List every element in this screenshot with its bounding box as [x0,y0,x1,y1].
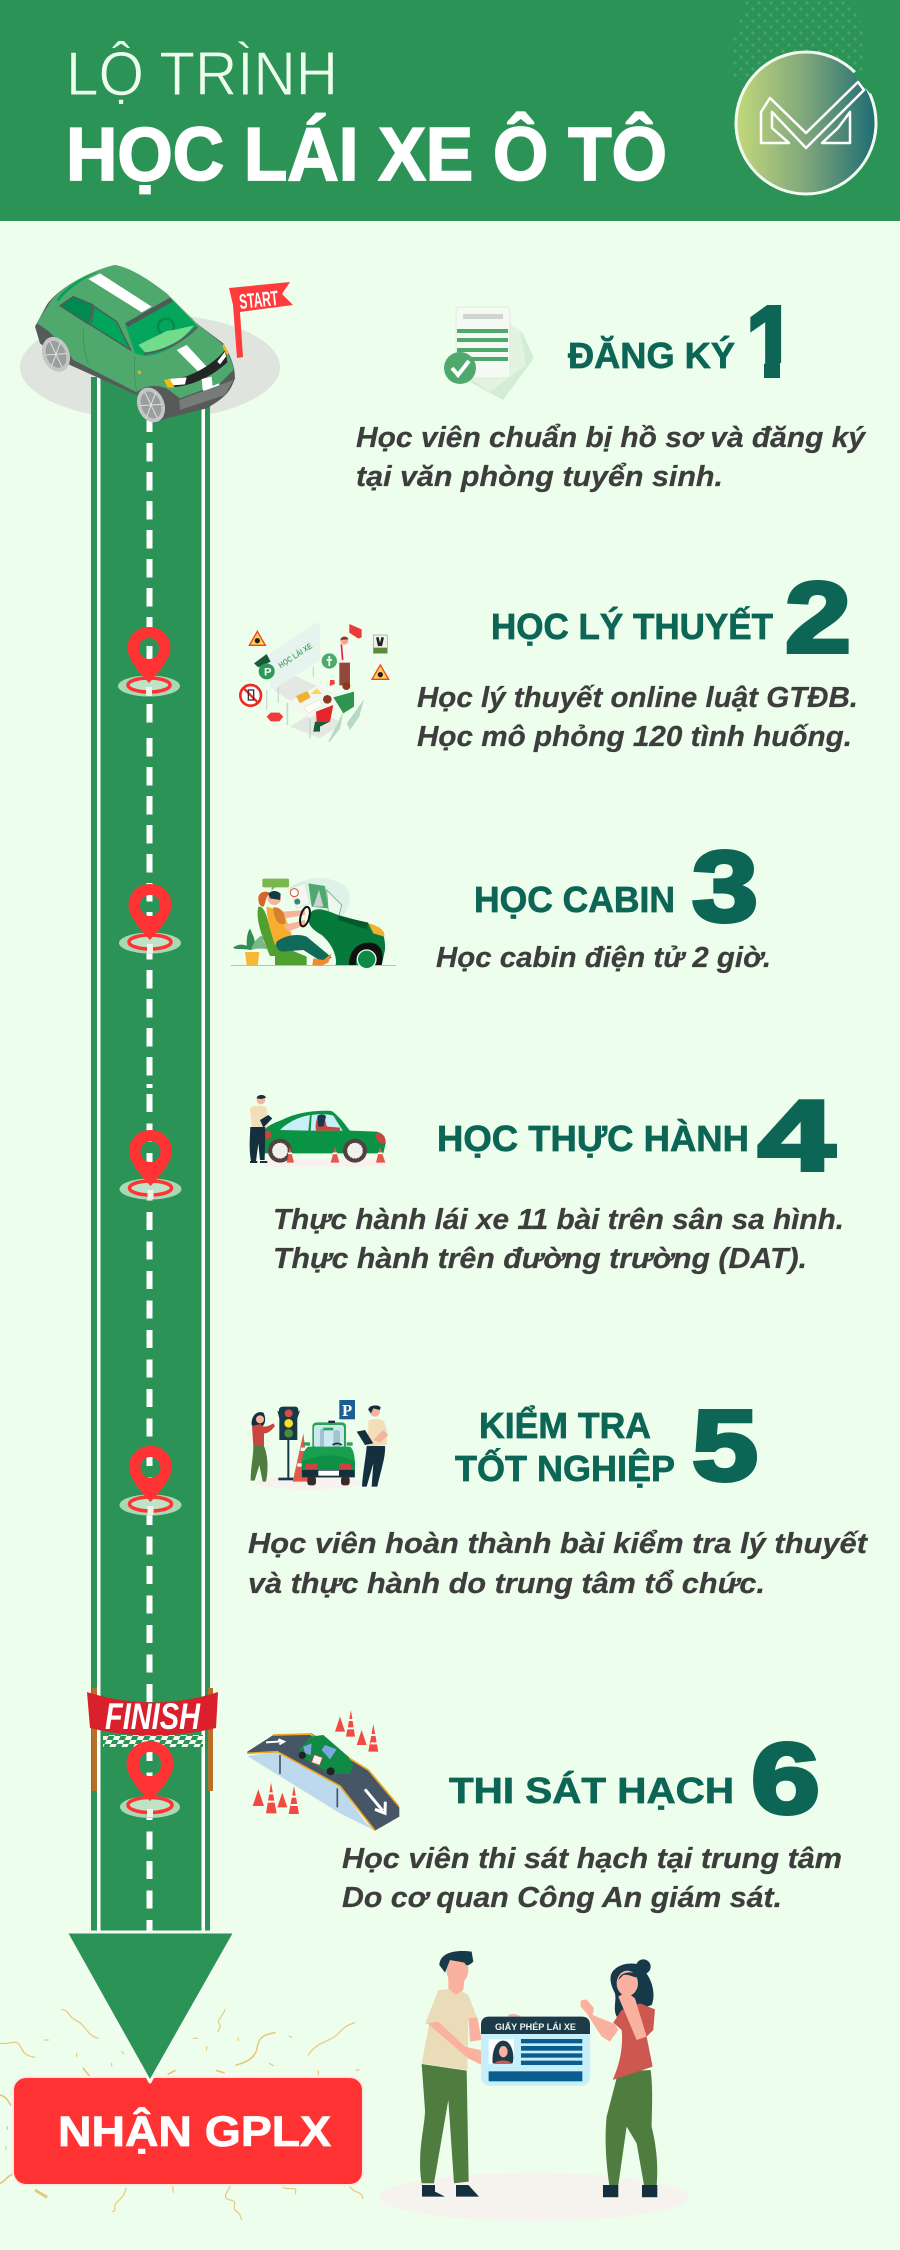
step 5 description [248,1528,868,1600]
start flag [229,282,293,358]
step 1 icon: documents [444,307,534,400]
step 6 description: Học viên thi sát hạch tại trung tâm [342,1843,842,1875]
pin 3 [120,1130,182,1200]
step 4 description [273,1204,844,1275]
step 2 icon: theory class: HỌC LÁI XE [277,641,314,670]
step 4 description: Thực hành lái xe 11 bài trên sân sa hình. [273,1204,844,1236]
confetti [0,2009,363,2220]
step 5 icon: checkpoint: P [342,1401,352,1420]
icon: car at start [35,265,235,427]
logo [736,52,876,194]
step 4 heading: HỌC THỰC HÀNH [437,1118,749,1159]
step 3 heading: HỌC CABIN [474,879,675,920]
step 5 icon: checkpoint [251,1400,388,1489]
licence card [481,2017,590,2086]
step 5 heading: TỐT NGHIỆP [455,1447,675,1489]
step 5 heading [455,1404,675,1489]
start flag: START [238,287,279,314]
header banner [0,0,900,221]
step 2 number: 2 [785,562,851,674]
step 5 description: và thực hành do trung tâm tổ chức. [248,1568,765,1600]
step 1 description: Học viên chuẩn bị hồ sơ và đăng ký [356,422,867,454]
pin 2 [119,884,181,954]
road [91,377,210,1933]
man [420,1951,523,2197]
step 4 icon: practice car [250,1095,387,1167]
step 1 description [356,422,867,493]
step 2 description: Học mô phỏng 120 tình huống. [417,721,852,753]
people holding licence [379,1951,689,2221]
step 4 description: Thực hành trên đường trường (DAT). [273,1243,807,1275]
step 1 description: tại văn phòng tuyển sinh. [356,461,723,493]
button: nhận GPLX [13,2077,363,2185]
step 2 description: Học lý thuyết online luật GTĐB. [417,682,858,714]
pin 5 [120,1741,180,1818]
step 3 number: 3 [692,831,758,943]
step 6 number: 6 [751,1723,820,1835]
title line 2: HỌC LÁI XE Ô TÔ [66,112,667,196]
step 2 description [417,682,858,753]
step 2 icon: theory class: P [264,667,272,679]
step 5 heading: KIỂM TRA [479,1404,651,1446]
step 2 heading: HỌC LÝ THUYẾT [491,606,773,647]
step 6 icon: exam ramp [247,1710,399,1831]
ground shadow [379,2173,689,2221]
finish gate: FINISH [105,1696,201,1737]
step 6 heading: THI SÁT HẠCH [449,1770,734,1811]
pin 1 [118,627,180,696]
title line 1: LỘ TRÌNH [66,40,338,109]
step 1 heading: ĐĂNG KÝ [568,335,735,376]
licence card: GIẤY PHÉP LÁI XE [495,2021,576,2032]
shadow under start car [20,314,280,440]
button: nhận GPLX: NHẬN GPLX [58,2107,331,2156]
step 2 icon: theory class [240,623,389,742]
step 3 description: Học cabin điện tử 2 giờ. [436,942,771,974]
step 3 icon: cabin simulator [231,878,396,969]
step 5 number: 5 [692,1390,758,1502]
woman [581,1959,657,2197]
finish gate [87,1688,218,1791]
road end arrow [66,1932,235,2082]
step 5 description: Học viên hoàn thành bài kiểm tra lý thuyết [248,1528,868,1560]
step 4 number: 4 [758,1080,836,1192]
step 6 description: Do cơ quan Công An giám sát. [342,1882,782,1914]
step 6 description [342,1843,842,1914]
pin 4 [120,1446,182,1516]
step 1 number: 1 [746,286,796,398]
